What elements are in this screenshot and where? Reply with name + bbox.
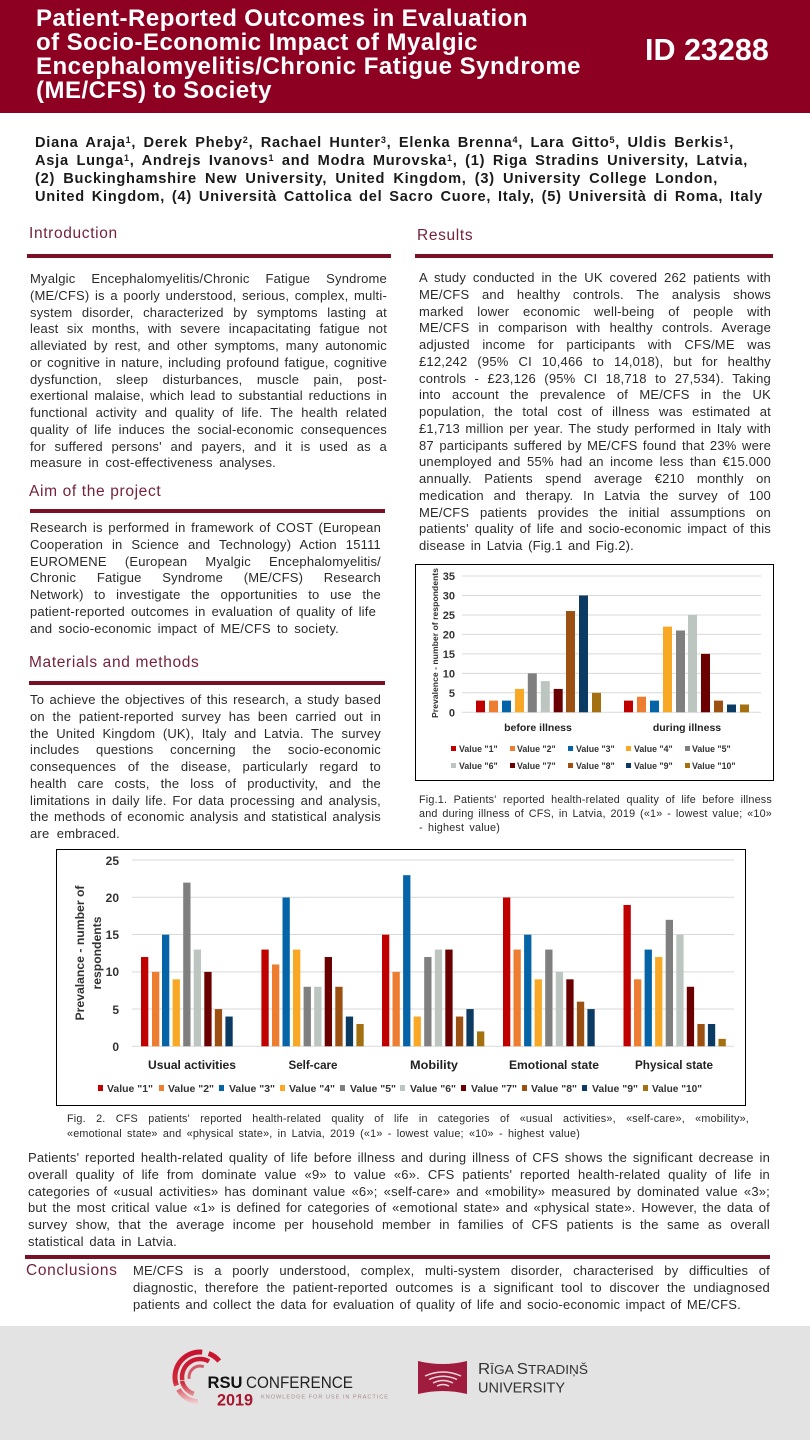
legend	[98, 1084, 702, 1095]
legend: Value "8"	[576, 761, 615, 771]
legend: Value "8"	[531, 1084, 577, 1095]
text: results: £1,713 million per year. The study performed in Italy with	[419, 421, 771, 436]
text: results discussion: survey show, that the average income per household member in families of CFS patients is the same as overall	[28, 1217, 770, 1232]
legend: Value "3"	[576, 744, 615, 754]
text: results	[419, 270, 771, 553]
text: introduction: or cognitive in nature, including profound fatigue, cognitive	[30, 355, 387, 370]
category labels: Usual activities	[148, 1058, 236, 1072]
text: results: population, the total cost of illness was estimated at	[419, 404, 771, 419]
logo: Riga Stradins University: UNIVERSITY	[478, 1380, 565, 1396]
logo: Riga Stradins University: RĪGA STRADIŅŠ	[478, 1361, 588, 1378]
legend: Value "5"	[350, 1084, 396, 1095]
header banner	[0, 0, 810, 113]
category labels	[148, 1058, 713, 1072]
text: results: ME/CFS and healthy controls. The analysis shows	[419, 287, 771, 302]
text: introduction: quality of life induces the social-economic consequences	[30, 422, 387, 437]
text: conclusions: ME/CFS is a poorly understood, complex, multi-system disorder, characterised by difficulties of	[133, 1263, 770, 1278]
legend: Value "6"	[459, 761, 498, 771]
axis numbers: 0	[112, 1040, 119, 1054]
axis labels	[443, 571, 455, 719]
authors and affiliations: (2) Buckinghamshire New University, United Kingdom, (3) University College London,	[35, 171, 718, 187]
axis labels: 10	[443, 668, 455, 680]
text: introduction: functional activity and quality of life. The health related	[30, 405, 387, 420]
text: results discussion: but the most critical value «1» is defined for categories of «emotional state» and «physical state». However, the data of	[28, 1200, 770, 1215]
caption: figure 1: Fig.1. Patients' reported health-related quality of life before illness	[419, 794, 772, 806]
axis title	[73, 884, 104, 1020]
text: aim: and socio-economic impact of ME/CFS to society.	[30, 621, 339, 636]
axis numbers: 10	[106, 965, 119, 979]
text: materials and methods: health care costs, the loss of productivity, and the	[30, 776, 381, 791]
text: materials and methods: are embraced.	[30, 826, 120, 841]
axis labels: 25	[443, 610, 455, 622]
category labels: Self-care	[288, 1058, 338, 1072]
text: results: controls - £23,126 (95% CI 18,718 to 27,534). Taking	[419, 371, 771, 386]
text: introduction: least six months, with severe incapacitating fatigue not	[30, 321, 387, 336]
text: results: A study conducted in the UK covered 262 patients with	[419, 270, 771, 285]
text: results: annually. Patients spend average €210 monthly on	[419, 471, 771, 486]
axis numbers: 20	[106, 891, 119, 905]
legend: Value "3"	[229, 1084, 275, 1095]
text: introduction: Myalgic Encephalomyelitis/Chronic Fatigue Syndrome	[30, 271, 387, 286]
chart: figure 1 before and during illness	[415, 564, 774, 781]
axis title: respondents	[90, 916, 104, 990]
text: introduction: exertional malaise, which lead to substantial reductions in	[30, 388, 387, 403]
title: Patient-Reported Outcomes in Evaluation	[36, 5, 528, 32]
text: aim: Cooperation in Science and Technology) Action 15111	[30, 537, 381, 552]
text: materials and methods: includes questions concerning the socio-economic	[30, 742, 381, 757]
authors and affiliations	[35, 135, 763, 205]
poster id: ID 23288	[645, 33, 769, 67]
axis labels: 0	[449, 707, 455, 719]
text: materials and methods: consequences of the disease, particularly regard to	[30, 759, 381, 774]
axis title: Prevalence - number of respondents	[430, 568, 440, 718]
text: results: 87 participants suffered by ME/CFS found that 23% were	[419, 438, 771, 453]
authors and affiliations: Asja Lunga1, Andrejs Ivanovs1 and Modra Murovska1, (1) Riga Stradins University, Latvia,	[35, 153, 748, 169]
bars: before illness	[476, 595, 601, 712]
heading: results: Results	[417, 227, 473, 244]
legend: Value "1"	[107, 1084, 153, 1095]
category labels: Emotional state	[509, 1058, 599, 1072]
footer band	[0, 1326, 810, 1440]
category labels: Physical state	[635, 1058, 713, 1072]
axis numbers: 5	[112, 1003, 119, 1017]
axis numbers: 25	[106, 854, 119, 868]
text: aim: patient-reported outcomes in evaluation of quality of life	[30, 604, 376, 619]
text: results discussion	[28, 1150, 770, 1249]
text: conclusions: diagnostic, therefore the patient-reported outcomes is a significant tool to discover the undiagnosed	[133, 1280, 770, 1295]
text: results: medication and therapy. In Latvia the survey of 100	[419, 488, 771, 503]
text: results discussion: overall quality of life from dominate value «9» to value «6». CFS patients' reported health-related quality of life in	[28, 1167, 770, 1182]
legend: Value "10"	[692, 761, 736, 771]
logo: RSU conference 2019: RSU	[208, 1373, 242, 1392]
text: aim: Chronic Fatigue Syndrome (ME/CFS) Research	[30, 570, 381, 585]
text: results discussion: Patients' reported health-related quality of life before illness and during illness of CFS shows the significant decrease in	[28, 1150, 770, 1165]
title: Encephalomyelitis/Chronic Fatigue Syndrome	[36, 53, 581, 80]
text: introduction: dysfunction, sleep disturbances, muscle pain, post-	[30, 372, 387, 387]
caption: figure 2	[67, 1113, 749, 1140]
text: materials and methods: the United Kingdom (UK), Italy and Latvia. The survey	[30, 726, 381, 741]
text: materials and methods: To achieve the objectives of this research, a study based	[30, 692, 381, 707]
text: results: ME/CFS in comparison with healthy controls. Average	[419, 320, 771, 335]
caption: figure 1	[419, 794, 772, 834]
text: aim	[30, 520, 381, 636]
chart: figure 2 categories	[56, 849, 746, 1106]
legend: Value "4"	[634, 744, 673, 754]
caption: figure 2: Fig. 2. CFS patients' reported health-related quality of life in categories of «usual activities», «self-care», «mobility»,	[67, 1113, 749, 1125]
chart: figure 1 before and during illness: during illness	[653, 722, 721, 734]
legend: Value "9"	[634, 761, 673, 771]
heading: introduction: Introduction	[29, 225, 118, 242]
category labels: Mobility	[410, 1058, 458, 1072]
title: of Socio-Economic Impact of Myalgic	[36, 29, 478, 56]
category labels: before illness	[504, 722, 572, 734]
text: results: adjusted income for participants with CFS/ME was	[419, 337, 771, 352]
caption: figure 1: - highest value)	[419, 822, 500, 834]
legend	[451, 744, 736, 771]
axis labels: 5	[449, 688, 455, 700]
text: introduction: (ME/CFS) is a poorly understood, serious, complex, multi-	[30, 288, 387, 303]
axis numbers: 15	[106, 928, 119, 942]
text: results discussion: statistical data in Latvia.	[28, 1234, 177, 1249]
text: results: marked lower economic well-being of people with	[419, 304, 771, 319]
logo: RSU conference 2019: CONFERENCE	[246, 1373, 353, 1392]
text: results: into account the prevalence of ME/CFS in the UK	[419, 387, 771, 402]
caption: figure 2: «emotional state» and «physical state», in Latvia, 2019 («1» - lowest value; «10» - highest value)	[67, 1128, 580, 1140]
text: materials and methods: limitations in daily life. For data processing and analysis,	[30, 793, 381, 808]
legend: Value "9"	[592, 1084, 638, 1095]
axis labels: 15	[443, 649, 455, 661]
legend: Value "7"	[517, 761, 556, 771]
legend: Value "2"	[517, 744, 556, 754]
axis labels: 35	[443, 571, 455, 583]
text: results: patients' quality of life and socio-economic impact of this	[419, 521, 771, 536]
bars: self-care	[261, 898, 364, 1046]
text: introduction: measure in cost-effectiveness analyses.	[30, 455, 276, 470]
authors and affiliations: Diana Araja1, Derek Pheby2, Rachael Hunter3, Elenka Brenna4, Lara Gitto5, Uldis Berkis1,	[35, 135, 734, 151]
text: introduction	[30, 271, 387, 470]
text: results: disease in Latvia (Fig.1 and Fig.2).	[419, 538, 634, 553]
bars: usual activities	[141, 883, 233, 1046]
legend: Value "1"	[459, 744, 498, 754]
heading: conclusions: Conclusions	[26, 1262, 118, 1279]
legend: Value "10"	[652, 1084, 702, 1095]
title	[36, 5, 581, 104]
legend: Value "4"	[289, 1084, 335, 1095]
text: results: £12,242 (95% CI 10,466 to 14,018), but for healthy	[419, 354, 771, 369]
title: (ME/CFS) to Society	[36, 77, 272, 104]
text: conclusions	[133, 1263, 770, 1312]
logo: RSU conference 2019	[172, 1350, 388, 1410]
logo: RSU conference 2019: KNOWLEDGE FOR USE IN PRACTICE	[261, 1394, 388, 1400]
text: introduction: system disorder, characterized by symptoms lasting at	[30, 305, 387, 320]
legend: Value "6"	[410, 1084, 456, 1095]
caption: figure 1: and during illness of CFS, in Latvia, 2019 («1» - lowest value; «10»	[419, 808, 772, 820]
bars: physical state	[624, 905, 726, 1046]
text: results: ME/CFS patients provides the initial assumptions on	[419, 505, 771, 520]
axis numbers	[106, 854, 119, 1054]
text: introduction: for suffered persons' and payers, and it is used as a	[30, 439, 387, 454]
bars: during illness	[624, 615, 749, 712]
logo: RSU conference 2019: 2019	[217, 1390, 253, 1410]
heading: materials and methods: Materials and methods	[29, 654, 199, 671]
bars: emotional state	[503, 898, 595, 1046]
axis title: Prevalance - number of	[73, 884, 87, 1020]
text: materials and methods: on the patient-reported survey has been carried out in	[30, 709, 381, 724]
legend: Value "2"	[168, 1084, 214, 1095]
text: materials and methods: the methods of economic analysis and statistical analysis	[30, 809, 381, 824]
legend: Value "7"	[471, 1084, 517, 1095]
bars: mobility	[382, 875, 484, 1046]
authors and affiliations: United Kingdom, (4) Università Cattolica del Sacro Cuore, Italy, (5) Università di Roma, Italy	[35, 189, 763, 205]
text: introduction: alleviated by rest, and other symptoms, many autonomic	[30, 338, 387, 353]
text: conclusions: patients and collect the data for evaluation of quality of life and socio-economic impact of ME/CFS.	[133, 1297, 741, 1312]
text: aim: Network) to investigate the opportunities to use the	[30, 587, 381, 602]
text: aim: Research is performed in framework of COST (European	[30, 520, 381, 535]
text: materials and methods	[30, 692, 381, 841]
logo: Riga Stradins University	[418, 1361, 588, 1396]
legend: Value "5"	[692, 744, 731, 754]
text: results: unemployed and 55% had an income less than €15.000	[419, 454, 771, 469]
axis labels: 30	[443, 590, 455, 602]
text: results discussion: categories of «usual activities» has dominant value «6»; «self-care» and «mobility» measured by dominated value «3»;	[28, 1184, 770, 1199]
heading: aim of the project: Aim of the project	[29, 483, 161, 500]
text: aim: EUROMENE (European Myalgic Encephalomyelitis/	[30, 554, 381, 569]
axis labels: 20	[443, 629, 455, 641]
